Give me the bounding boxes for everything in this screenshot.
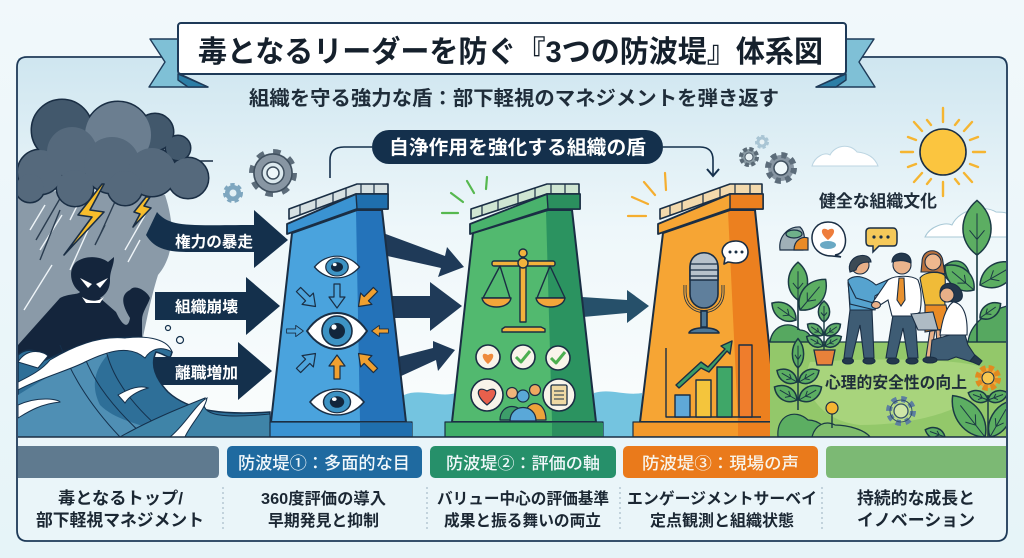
person: man with tie bbox=[872, 253, 921, 364]
person: woman in yellow bbox=[920, 251, 950, 357]
icon: microphone bbox=[685, 253, 723, 333]
tower: orange breakwater bbox=[633, 184, 786, 437]
tower: green breakwater bbox=[445, 184, 603, 437]
icon: eye centre bbox=[307, 313, 367, 349]
label: shield pill: 自浄作用を強化する組織の盾 bbox=[389, 137, 646, 159]
ground bbox=[770, 342, 1006, 437]
wave bbox=[18, 326, 270, 437]
gear large left bbox=[253, 153, 293, 193]
sparks green bbox=[442, 177, 487, 213]
bushes behind bbox=[770, 261, 1007, 342]
arrow: blue to green top bbox=[383, 233, 464, 277]
text: engagement survey: エンゲージメントサーベイ bbox=[627, 489, 817, 508]
icon: scales bbox=[482, 249, 565, 332]
icon: heart and check bubbles with people bbox=[471, 345, 575, 421]
arrow: organisation collapse: 組織崩壊 bbox=[175, 297, 238, 316]
ribbon right bbox=[816, 39, 875, 87]
label: shield pill bbox=[372, 130, 663, 164]
text: toxic top: 部下軽視マネジメント bbox=[36, 511, 204, 530]
arrow: power runaway bbox=[146, 210, 288, 268]
icon: eye bottom bbox=[310, 389, 364, 415]
sky bbox=[18, 58, 1006, 438]
flower gear bbox=[978, 368, 998, 437]
gear blue-grey bottom bbox=[889, 399, 913, 423]
storm rain area bbox=[18, 191, 171, 345]
arrow: blue to green bottom bbox=[398, 341, 455, 377]
dotted dividers bbox=[223, 487, 822, 530]
text: value based evaluation: 成果と振る舞いの両立 bbox=[444, 511, 601, 530]
text: 360 evaluation bbox=[261, 489, 386, 530]
sparks orange bbox=[628, 173, 666, 216]
plant: potted bbox=[804, 301, 844, 365]
arrow: turnover increase bbox=[145, 342, 272, 400]
title: 毒となるリーダーを防ぐ『3つの防波堤』体系図 bbox=[198, 35, 823, 69]
icon: arrows converging on the eye bbox=[287, 284, 388, 379]
text: sustainable growth: 持続的な成長と bbox=[857, 488, 975, 508]
arrow: green to orange bbox=[582, 290, 649, 323]
text: psychological safety: 心理的安全性の向上 bbox=[825, 373, 967, 392]
storm cloud bbox=[16, 100, 213, 206]
person: seated with laptop bbox=[911, 283, 982, 365]
header: breakwater 2 bbox=[430, 446, 616, 478]
header: breakwater 3 bbox=[623, 446, 818, 478]
plant: big right bbox=[944, 200, 1006, 342]
text: toxic top: 毒となるトップ/ bbox=[58, 489, 183, 508]
text: 360 evaluation: 早期発見と抑制 bbox=[268, 512, 379, 530]
icon: speech bubble bbox=[722, 241, 748, 264]
icon: lightning bolts bbox=[64, 184, 151, 255]
header: breakwater 2: 防波堤②：評価の軸 bbox=[446, 454, 600, 473]
tower: blue breakwater bbox=[270, 184, 412, 437]
cloud right bbox=[925, 208, 1008, 237]
header: breakwater 3: 防波堤③：現場の声 bbox=[642, 454, 799, 473]
title banner bbox=[149, 23, 875, 87]
speech bubble yellow bbox=[866, 228, 897, 252]
header: breakwater 1 bbox=[227, 446, 422, 478]
icon: two heads bbox=[780, 227, 808, 250]
gears right bbox=[741, 136, 794, 181]
text: toxic top bbox=[36, 489, 204, 530]
header: light green bbox=[826, 446, 1006, 478]
header: grey bbox=[18, 446, 219, 478]
icon: eye top bbox=[314, 256, 360, 278]
text: healthy culture: 健全な組織文化 bbox=[819, 192, 937, 211]
plant: left tall bbox=[771, 261, 828, 330]
gear small left bbox=[225, 185, 241, 201]
text: value based evaluation: バリュー中心の評価基準 bbox=[437, 489, 609, 508]
panel: main illustration bbox=[16, 58, 1022, 444]
bottom panel background bbox=[18, 437, 1006, 540]
cloud upper bbox=[812, 146, 878, 166]
text: engagement survey bbox=[627, 489, 817, 530]
subtitle: 組織を守る強力な盾：部下軽視のマネジメントを弾き返す bbox=[249, 86, 779, 110]
text: sustainable growth: イノベーション bbox=[857, 511, 975, 530]
text: engagement survey: 定点観測と組織状態 bbox=[650, 511, 794, 530]
person: blue sweater bbox=[842, 255, 894, 364]
arrow: turnover increase: 離職増加 bbox=[175, 363, 238, 382]
arrow: organisation collapse bbox=[155, 277, 280, 335]
icon: sun bbox=[901, 108, 985, 196]
text: value based evaluation bbox=[437, 489, 609, 530]
water between towers bbox=[404, 391, 642, 437]
arrow: blue to green middle bbox=[388, 282, 462, 331]
header: breakwater 1: 防波堤①：多面的な目 bbox=[238, 454, 410, 473]
bar chart bbox=[666, 341, 761, 417]
text: sustainable growth bbox=[857, 488, 975, 530]
plant: bottom right leaves bbox=[923, 388, 1019, 444]
divider under scene bbox=[18, 436, 1006, 438]
villain silhouette bbox=[18, 257, 150, 359]
arrow: power runaway: 権力の暴走 bbox=[175, 232, 253, 251]
ribbon left bbox=[149, 39, 208, 87]
plant: foreground left bbox=[771, 339, 870, 437]
column headers bbox=[18, 446, 1006, 478]
connector to shield label bbox=[330, 147, 719, 178]
icon: heart speech bubble bbox=[812, 222, 845, 257]
text: 360 evaluation: 360度評価の導入 bbox=[261, 489, 386, 508]
